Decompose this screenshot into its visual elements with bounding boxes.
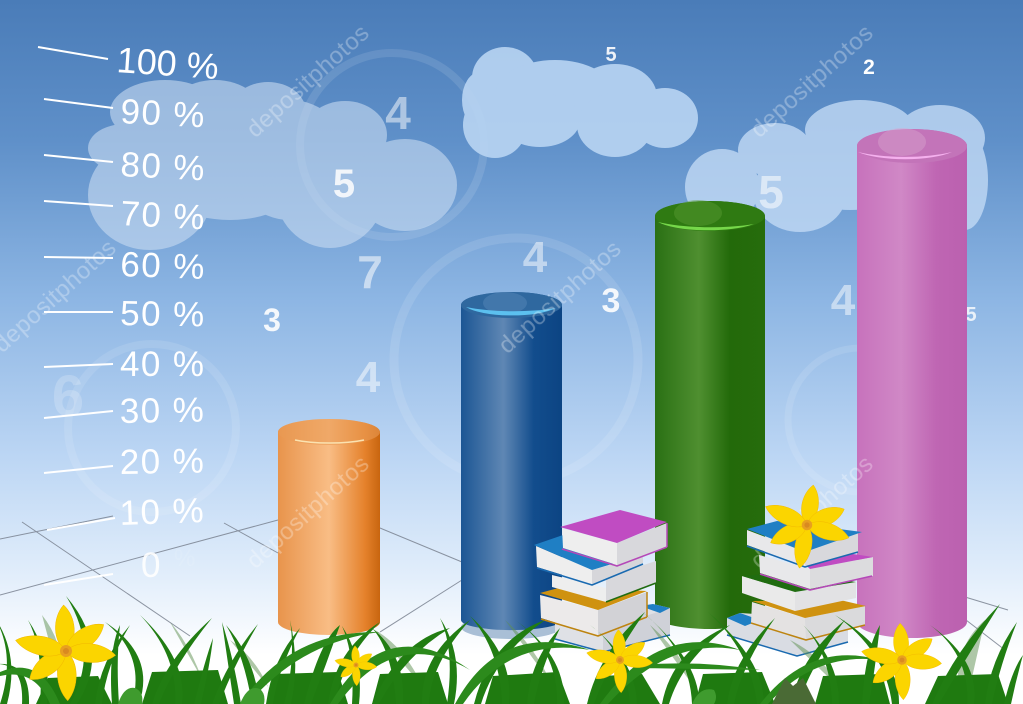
book: lower blue	[555, 604, 670, 652]
scattered numbers: 5	[605, 44, 617, 66]
grass thin background blades	[42, 615, 985, 704]
bar: purple cylinder	[857, 128, 967, 638]
scattered numbers: 5	[758, 166, 784, 218]
scattered numbers: 5	[333, 162, 355, 206]
flower: small left	[334, 646, 377, 686]
grass	[0, 596, 1023, 704]
scattered numbers: 5	[965, 304, 977, 326]
percent scale ticks	[38, 47, 115, 585]
flower: large left	[14, 605, 116, 701]
background rings	[68, 53, 932, 512]
percent scale labels: 90 %	[120, 92, 206, 135]
percent scale labels: 30 %	[119, 391, 204, 431]
bar: orange cylinder	[278, 419, 380, 635]
scattered numbers: 7	[357, 246, 383, 298]
book: lower blue	[727, 613, 848, 656]
scattered numbers: 6	[52, 364, 84, 429]
scattered numbers: 4	[356, 353, 381, 402]
scattered numbers: 4	[523, 233, 548, 282]
bar: green cylinder	[655, 200, 765, 629]
percent scale labels: 80 %	[120, 145, 206, 188]
scattered numbers: 3	[263, 302, 281, 338]
flower: on books	[753, 475, 859, 577]
watermark text: depositphotos	[493, 236, 627, 359]
book stack left	[534, 510, 670, 652]
percent scale labels: 50 %	[120, 294, 205, 334]
scattered numbers: 2	[863, 56, 875, 79]
percent scale labels: 40 %	[120, 345, 204, 384]
grass blades dark	[0, 596, 1023, 704]
book: orange	[540, 587, 647, 636]
watermark text: depositphotos	[241, 20, 375, 143]
percent scale labels: 100 %	[115, 39, 220, 87]
book: orange	[751, 600, 866, 640]
scattered numbers: 3	[602, 282, 620, 320]
book: blue	[747, 521, 862, 567]
flower: right	[860, 623, 942, 700]
cloud left	[88, 80, 457, 250]
grass blades olive	[772, 678, 816, 704]
scattered numbers: 4	[385, 87, 411, 139]
scattered numbers: 4	[831, 276, 856, 325]
percent scale labels	[115, 39, 220, 585]
book: blue	[534, 535, 643, 585]
book stack right	[727, 521, 873, 656]
book: green	[552, 561, 656, 602]
grass blades arched	[0, 632, 880, 704]
cloud middle	[462, 47, 698, 158]
percent scale labels: 70 %	[120, 194, 206, 237]
grass blades light	[118, 688, 716, 704]
percent scale labels: 0	[141, 546, 160, 585]
book: purple	[759, 552, 873, 590]
watermark text: depositphotos	[745, 451, 879, 574]
percent scale labels: %	[174, 545, 195, 572]
percent scale labels: 60 %	[120, 245, 205, 287]
book: purple	[560, 510, 667, 566]
watermark text	[0, 20, 879, 574]
watermark text: depositphotos	[745, 20, 879, 143]
flower: center	[585, 629, 653, 693]
cloud right	[685, 100, 988, 232]
percent scale labels: 20 %	[119, 442, 204, 482]
book: green	[742, 572, 856, 611]
percent scale labels: 10 %	[119, 491, 204, 533]
grass base clumps	[36, 670, 1008, 704]
scattered numbers	[52, 44, 977, 429]
bar: blue cylinder	[461, 292, 562, 639]
watermark text: depositphotos	[241, 451, 375, 574]
ground grid lines	[0, 516, 1008, 650]
